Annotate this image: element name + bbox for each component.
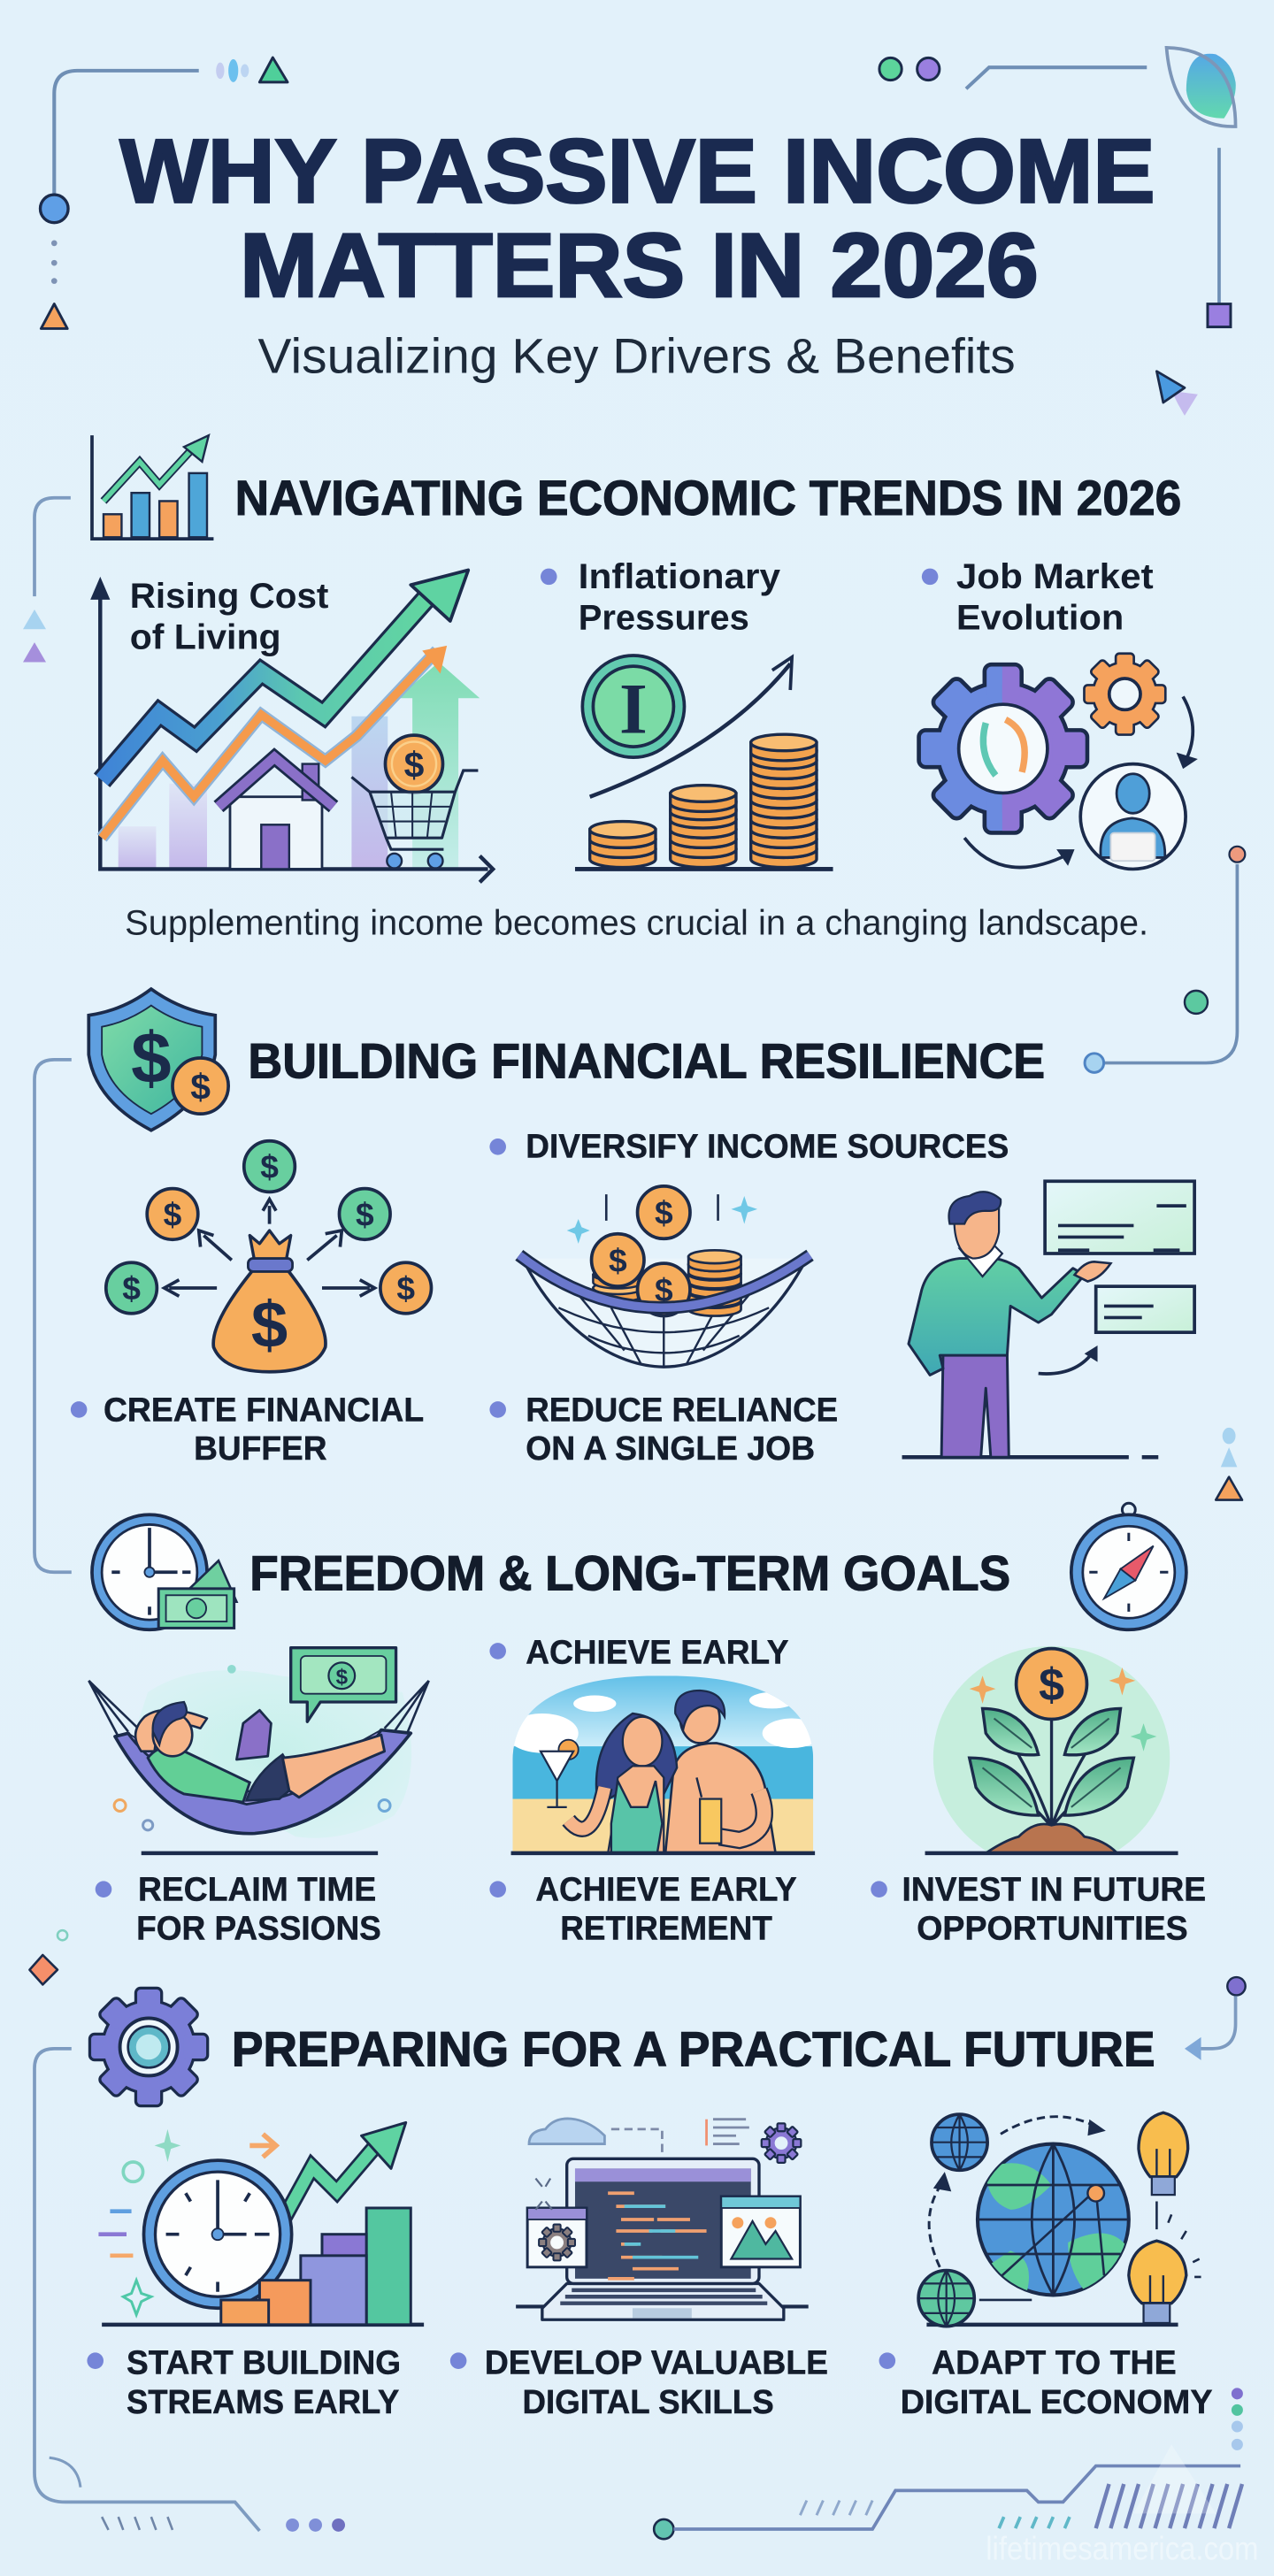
icon: gear bbox=[91, 1990, 206, 2104]
label: diversify income sources: DIVERSIFY INCOME SOURCES bbox=[526, 1128, 1009, 1165]
icon: money bag and coins: $ bbox=[356, 1195, 374, 1232]
label: rising cost of living bbox=[130, 577, 328, 657]
connector: section one left bbox=[35, 498, 71, 596]
icon: house bbox=[219, 757, 334, 869]
icon: shopping cart with coin bbox=[351, 735, 478, 869]
label: inflationary pressures: Pressures bbox=[579, 598, 749, 637]
label: adapt: DIGITAL ECONOMY bbox=[901, 2384, 1213, 2421]
panel: freedom and long-term goals bbox=[88, 1503, 1206, 1947]
label: create financial buffer: BUFFER bbox=[194, 1430, 327, 1468]
icon: money bag and coins: $ bbox=[122, 1269, 141, 1307]
label: adapt bbox=[879, 2345, 1213, 2421]
label: develop valuable bbox=[450, 2345, 828, 2421]
icon: shopping cart with coin: $ bbox=[404, 744, 425, 785]
illustration: money plant bbox=[925, 1646, 1178, 1869]
label: job market evolution: Evolution bbox=[956, 598, 1124, 637]
heading: freedom and goals: FREEDOM & LONG-TERM GOALS bbox=[249, 1546, 1010, 1601]
header decoration bbox=[40, 48, 1236, 416]
label: reclaim time: RECLAIM TIME bbox=[138, 1872, 376, 1909]
label: achieve early retirement: ACHIEVE EARLY bbox=[535, 1872, 797, 1909]
icon: coins in safety net: $ bbox=[609, 1241, 627, 1278]
connector: left side sections two and three bbox=[35, 1060, 72, 1572]
label: rising cost of living: of Living bbox=[130, 618, 281, 657]
label: start building: START BUILDING bbox=[127, 2345, 401, 2382]
title: MATTERS IN 2026 bbox=[240, 215, 1039, 316]
connector: right arrow bbox=[1185, 1977, 1246, 2060]
icon: compass bbox=[1071, 1503, 1186, 1629]
decoration: left diamond bbox=[29, 1930, 67, 1984]
chart: rising cost of living bbox=[90, 570, 493, 882]
icon: bar chart heading bbox=[92, 435, 213, 539]
icon: coins in safety net bbox=[519, 1186, 810, 1367]
heading: practical future: PREPARING FOR A PRACTICAL FUTURE bbox=[232, 2021, 1155, 2076]
label: start building: STREAMS EARLY bbox=[127, 2384, 399, 2421]
connector: left bottom frame bbox=[35, 2049, 259, 2531]
label: reduce reliance: REDUCE RELIANCE bbox=[526, 1392, 838, 1429]
illustration: money plant: $ bbox=[1039, 1660, 1064, 1711]
panel: financial resilience bbox=[71, 989, 1242, 1500]
icon: shield with coin bbox=[88, 989, 228, 1131]
illustration: couple on beach bbox=[506, 1675, 822, 1853]
icon: money bag and coins bbox=[106, 1141, 431, 1372]
label: achieve early retirement: RETIREMENT bbox=[560, 1910, 772, 1947]
icon: inflation coin and stacks bbox=[575, 656, 833, 869]
icon: person presenting checks bbox=[902, 1181, 1194, 1457]
label: create financial buffer bbox=[71, 1392, 424, 1468]
body: supplementing income: Supplementing income becomes crucial in a changing landscape. bbox=[125, 904, 1148, 943]
panel: economic trends bbox=[23, 435, 1198, 943]
label: reclaim time bbox=[96, 1872, 381, 1947]
illustration: person in hammock bbox=[88, 1648, 429, 1838]
illustration: person in hammock: $ bbox=[336, 1666, 349, 1690]
title bbox=[120, 120, 1155, 316]
decoration: right shapes bbox=[1216, 1428, 1242, 1500]
label: job market evolution: Job Market bbox=[956, 557, 1154, 596]
label: develop valuable: DIGITAL SKILLS bbox=[523, 2384, 774, 2421]
label: invest in future: INVEST IN FUTURE bbox=[902, 1872, 1206, 1909]
label: inflationary pressures bbox=[541, 557, 780, 637]
panel: practical future bbox=[35, 1977, 1246, 2531]
heading: financial resilience: BUILDING FINANCIAL RESILIENCE bbox=[248, 1033, 1045, 1088]
icon: money bag and coins: $ bbox=[164, 1195, 182, 1232]
label: reduce reliance bbox=[489, 1392, 838, 1468]
illustration: clock and growth bars bbox=[98, 2122, 424, 2325]
label: inflationary pressures: Inflationary bbox=[579, 557, 780, 596]
footer decoration bbox=[50, 2388, 1243, 2539]
label: reclaim time: FOR PASSIONS bbox=[136, 1910, 381, 1947]
icon: shield with coin: $ bbox=[131, 1018, 172, 1099]
icon: money bag and coins: $ bbox=[396, 1269, 415, 1307]
label: create financial buffer: CREATE FINANCIAL bbox=[104, 1392, 424, 1429]
label: achieve early heading: ACHIEVE EARLY bbox=[526, 1634, 788, 1671]
icon: inflation coin and stacks: I bbox=[619, 668, 648, 748]
connector: right side to section two bbox=[1085, 847, 1245, 1072]
heading: economic trends: NAVIGATING ECONOMIC TRENDS IN 2026 bbox=[235, 471, 1181, 525]
icon: coins in safety net: $ bbox=[655, 1271, 673, 1308]
label: job market evolution bbox=[922, 557, 1154, 637]
label: rising cost of living: Rising Cost bbox=[130, 577, 328, 616]
label: start building bbox=[87, 2345, 401, 2421]
illustration: laptop with code bbox=[516, 2119, 809, 2319]
label: achieve early retirement bbox=[489, 1872, 797, 1947]
label: adapt: ADAPT TO THE bbox=[932, 2345, 1177, 2382]
label: reduce reliance: ON A SINGLE JOB bbox=[526, 1430, 815, 1468]
label: invest in future: OPPORTUNITIES bbox=[917, 1910, 1188, 1947]
icon: shield with coin: $ bbox=[190, 1066, 211, 1107]
icon: coins in safety net: $ bbox=[655, 1194, 673, 1231]
baseline under hammock bbox=[142, 1852, 378, 1854]
subtitle: Visualizing Key Drivers & Benefits bbox=[258, 329, 1016, 384]
label: invest in future bbox=[871, 1872, 1206, 1947]
icon: clock with money bbox=[92, 1514, 236, 1629]
illustration: globe and bulbs bbox=[918, 2112, 1201, 2327]
icon: gears and worker bbox=[921, 655, 1198, 869]
label: develop valuable: DEVELOP VALUABLE bbox=[485, 2345, 828, 2382]
icon: money bag and coins: $ bbox=[251, 1288, 288, 1361]
icon: triangles left bbox=[23, 610, 46, 662]
icon: money bag and coins: $ bbox=[260, 1148, 279, 1185]
title: WHY PASSIVE INCOME bbox=[120, 120, 1155, 221]
